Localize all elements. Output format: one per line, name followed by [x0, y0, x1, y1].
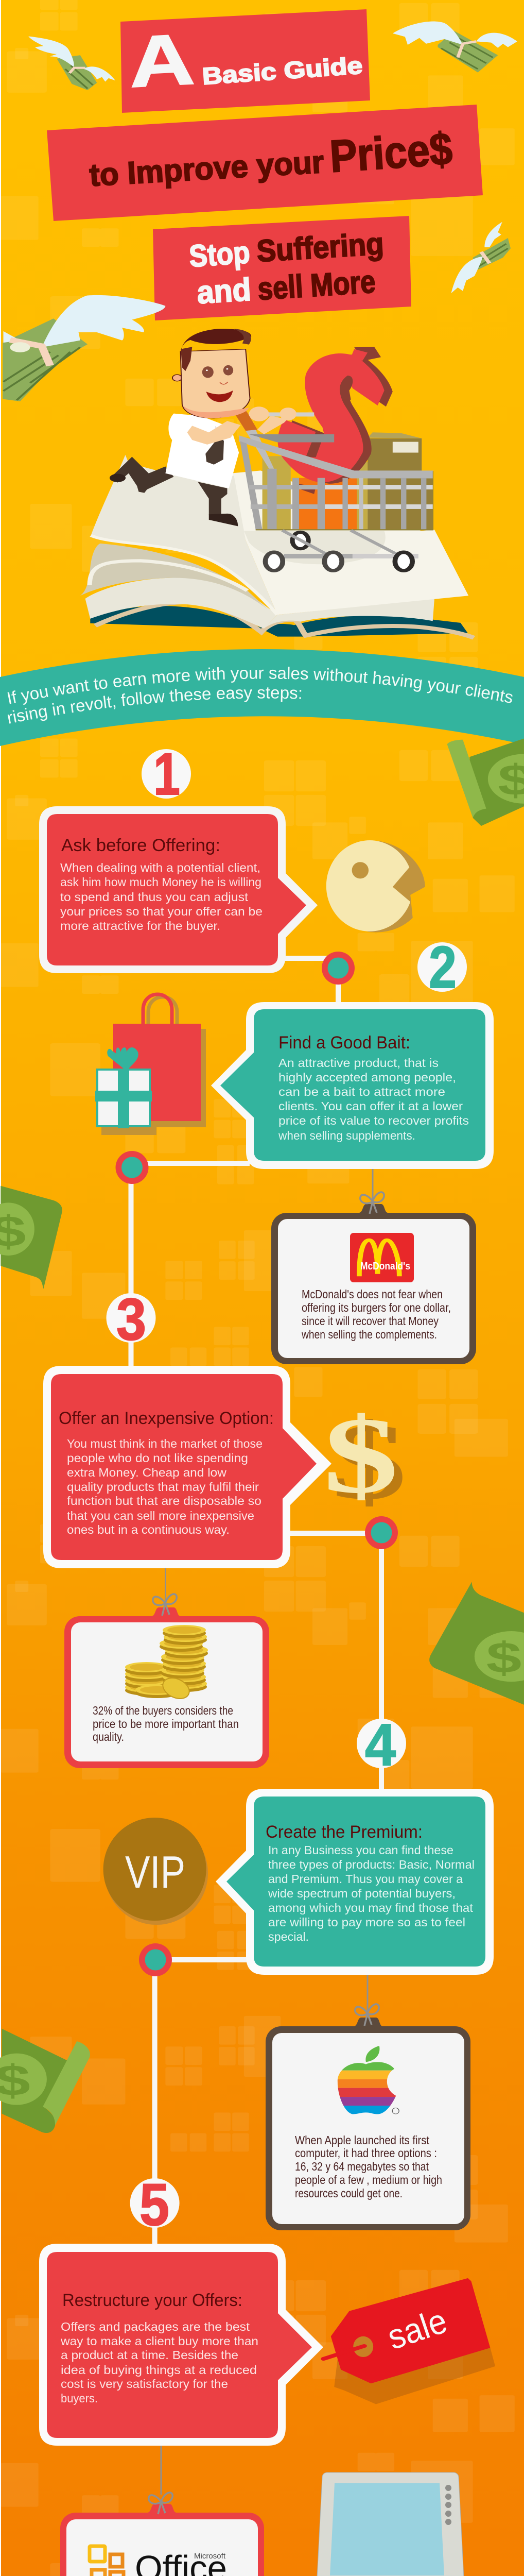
title banner: A Basic Guide: Basic Guide: [201, 52, 363, 90]
note text: [301, 1287, 451, 1341]
icon: rainbow Apple logo: [334, 2046, 401, 2115]
string with bow: coins note: [165, 1568, 166, 1604]
body text: are willing to pay more so as to feel: [268, 1916, 465, 1929]
connector: panel 1 to panel 2: [283, 952, 355, 1005]
icon: banknote top right: [447, 738, 524, 826]
panel: step 3 Offer an Inexpensive Option: [43, 1366, 331, 1568]
businessman: [110, 329, 296, 526]
body text: buyers.: [61, 2392, 98, 2405]
icon: sale tag: [323, 2278, 495, 2404]
number badge 5: 5: [139, 2172, 169, 2238]
teal intro banner: If you want to earn more with your sales without having your clients: [7, 667, 513, 705]
note text: McDonald's does not fear when: [302, 1287, 443, 1301]
icon: big winged money left: [3, 295, 165, 401]
title banner: Stop Suffering and sell More: sell More: [256, 264, 376, 307]
note text: 32% of the buyers considers the: [93, 1704, 233, 1717]
title banner: Stop Suffering and sell More: and: [196, 272, 252, 311]
body text: highly accepted among people,: [278, 1071, 456, 1084]
title banner: Stop Suffering and sell More: [153, 216, 411, 320]
body text: that you can sell more inexpensive: [67, 1509, 254, 1522]
number badge 1: 1: [153, 741, 180, 807]
heading: Create the Premium:: [266, 1822, 423, 1842]
icon: banknote left: [0, 1186, 62, 1289]
number badge 3: 3: [116, 1286, 146, 1352]
body text: When dealing with a potential client,: [60, 861, 260, 874]
body text: to spend and thus you can adjust: [60, 890, 249, 904]
title banner: to Improve your Prices: Price$: [328, 123, 454, 182]
panel: McDonald's note: [271, 1192, 476, 1364]
body text: [60, 861, 263, 933]
cart products: [263, 432, 433, 530]
connector: panel 2 to panel 3: [115, 1151, 250, 1370]
number badge 2: [417, 935, 467, 1001]
body text: [278, 1056, 469, 1142]
note text: quality.: [93, 1730, 124, 1743]
illustration: businessman pushing cart on a book: [80, 329, 474, 638]
body text: three types of products: Basic, Normal: [268, 1858, 475, 1871]
icon: gold coins: [125, 1625, 208, 1703]
number badge 1: [142, 741, 191, 807]
string with bow: McDonald's note: [372, 1169, 374, 1205]
icon: Office logo: Microsoft: [194, 2552, 226, 2561]
title banner: to Improve your Prices: to Improve your: [89, 144, 325, 193]
title banner: to Improve your Prices: [47, 105, 483, 221]
body text: [60, 2320, 258, 2405]
body text: [268, 1843, 475, 1943]
icon: VIP badge: [103, 1818, 208, 1925]
title banner: A Basic Guide: [120, 9, 370, 113]
icon: banknote right: $: [486, 1633, 521, 1682]
icon: winged money top right: [393, 21, 517, 73]
icon: Office logo: [90, 2546, 227, 2576]
note text: price to be more important than: [93, 1717, 239, 1731]
string: Office note: [161, 2446, 162, 2495]
number badge 4: [357, 1712, 406, 1778]
body text: In any Business you can find these: [268, 1843, 453, 1857]
body text: extra Money. Cheap and low: [67, 1466, 226, 1479]
icon: pacman: [326, 840, 425, 933]
body text: clients. You can offer it at a lower: [278, 1099, 463, 1113]
note text: When Apple launched its first: [295, 2133, 430, 2147]
body text: idea of buying things at a reduced: [61, 2363, 257, 2377]
body text: You must think in the market of those: [67, 1437, 263, 1450]
heading: Ask before Offering:: [61, 836, 220, 855]
note text: when selling the complements.: [301, 1328, 437, 1341]
icon: McDonald's logo: McDonald's: [360, 1261, 410, 1272]
title banner: A Basic Guide: A: [127, 19, 196, 103]
heading: Find a Good Bait:: [278, 1033, 410, 1053]
icon: sale tag: sale: [383, 2301, 452, 2357]
panel: Apple note: [266, 2004, 470, 2230]
title banner: Stop Suffering and sell More: Stop: [188, 235, 251, 274]
icon: dollar sign: [323, 1395, 407, 1522]
body text: special.: [268, 1930, 309, 1943]
body text: wide spectrum of potential buyers,: [268, 1887, 456, 1900]
body text: can be a bait to attract more: [278, 1085, 445, 1098]
connector: panel 3 to panel 4: [288, 1516, 398, 1793]
body text: way to make a client buy more than: [60, 2334, 258, 2348]
teal intro banner: rising in revolt, follow these easy steps:: [7, 687, 302, 723]
body text: price of its value to recover profits: [278, 1114, 469, 1127]
icon: winged money top left: [28, 37, 115, 90]
note text: resources could get one.: [295, 2187, 403, 2200]
body text: An attractive product, that is: [278, 1056, 439, 1070]
title banner: Stop Suffering and sell More: Suffering: [256, 226, 385, 268]
string: Apple note: [366, 1975, 369, 2011]
body text: function but that are disposable so: [67, 1494, 261, 1507]
panel: step 2 Find a Good Bait: [211, 1002, 494, 1169]
body text: and Premium. Thus you may cover a: [268, 1872, 463, 1886]
body text: Offers and packages are the best: [61, 2320, 250, 2333]
book: [80, 455, 474, 638]
body text: cost is very satisfactory for the: [61, 2377, 228, 2391]
body text: [67, 1437, 263, 1536]
icon: dollar sign: $: [323, 1395, 398, 1516]
panel: step 4 Create the Premium: [216, 1789, 494, 1975]
note text: since it will recover that Money: [302, 1314, 439, 1328]
icon: VIP badge: VIP: [125, 1846, 185, 1897]
heading: Restructure your Offers:: [62, 2291, 242, 2310]
dollar sign: [278, 347, 393, 494]
body text: a product at a time. Besides the: [61, 2348, 238, 2362]
panel: step 5 Restructure your Offers: [39, 2244, 323, 2446]
body text: more attractive for the buyer.: [60, 919, 220, 933]
body text: people who do not like spending: [67, 1451, 248, 1465]
note text: computer, it had three options :: [295, 2146, 437, 2160]
icon: desktop computer: [310, 2472, 494, 2576]
panel: Microsoft Office note: [60, 2493, 264, 2576]
icon: McDonald's logo: [350, 1233, 414, 1282]
number badge 3: [106, 1286, 155, 1352]
connector: panel 4 to panel 5: [139, 1943, 250, 2246]
note text: [295, 2133, 442, 2200]
note text: [93, 1704, 239, 1743]
teal intro banner: [0, 649, 524, 746]
icon: banknote right: [429, 1582, 524, 1705]
number badge 5: [130, 2172, 180, 2238]
number badge 4: 4: [365, 1712, 396, 1778]
shopping cart: [239, 412, 433, 571]
body text: ones but in a continuous way.: [67, 1523, 230, 1536]
note text: 16, 32 y 64 megabytes so that: [295, 2160, 429, 2173]
panel: step 1 Ask before Offering: [39, 806, 318, 973]
heading: Offer an Inexpensive Option:: [59, 1409, 274, 1428]
icon: dollar sign: $: [331, 1401, 407, 1522]
icon: banknote lower left: [0, 2028, 90, 2133]
panel: coins note: [64, 1594, 269, 1768]
body text: among which you may find those that: [268, 1901, 474, 1914]
note text: people of a few , medium or high: [295, 2173, 442, 2187]
note text: offering its burgers for one dollar,: [302, 1301, 451, 1314]
icon: shopping bag and gift: [95, 994, 206, 1135]
body text: ask him how much Money he is willing: [60, 875, 261, 889]
icon: winged money right: [451, 222, 511, 293]
number badge 2: 2: [429, 935, 457, 1001]
body text: your prices so that your offer can be: [60, 905, 263, 918]
body text: quality products that may fulfil their: [67, 1480, 259, 1494]
body text: when selling supplements.: [278, 1129, 415, 1142]
